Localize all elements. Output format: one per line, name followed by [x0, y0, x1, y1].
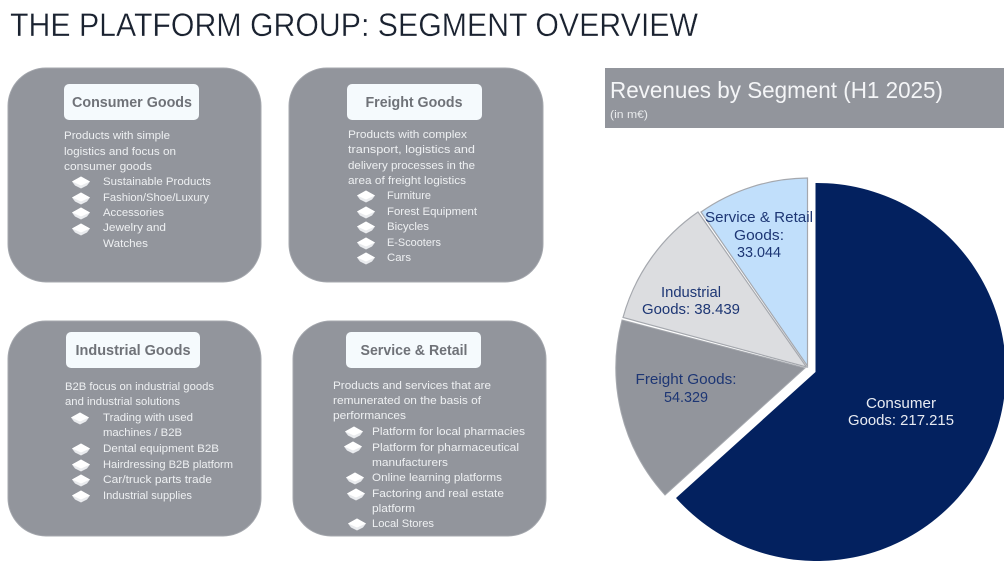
list: Freight Goods items: Forest Equipment	[387, 206, 478, 218]
label: Industrial: Goods: 38.439	[642, 302, 740, 318]
list: Service & Retail items: Local Stores	[372, 518, 434, 530]
panel: Consumer Goods	[8, 68, 261, 282]
text: Industrial Goods description: B2B focus on industrial goods	[65, 381, 214, 393]
text: Service & Retail description: performances	[333, 410, 406, 422]
list: Consumer Goods items: Sustainable Products	[103, 176, 211, 188]
label: Service & Retail: 33.044	[737, 245, 781, 261]
heading: Industrial Goods: Industrial Goods	[76, 343, 190, 359]
list: Consumer Goods items: Jewelry and	[103, 222, 166, 234]
list: Service & Retail items: manufacturers	[372, 457, 448, 469]
heading: Consumer Goods	[64, 84, 199, 120]
pie chart	[616, 178, 1004, 561]
list: Industrial Goods items	[71, 412, 233, 502]
text: Freight Goods description: Products with complex	[348, 129, 467, 141]
heading: Freight Goods	[347, 84, 482, 120]
list: Industrial Goods items: Hairdressing B2B platform	[103, 459, 233, 471]
text: Service & Retail description: remunerated on the basis of	[333, 395, 482, 407]
heading: Industrial Goods	[66, 332, 200, 368]
label: Freight Goods: 54.329	[664, 390, 708, 406]
label: Industrial: Industrial	[661, 285, 721, 301]
label: Service & Retail: Service & Retail	[705, 210, 813, 226]
slice: Industrial Goods	[623, 212, 806, 367]
text: Freight Goods description: area of freight logistics	[348, 175, 466, 187]
list: Consumer Goods items: Accessories	[103, 207, 164, 219]
list: Service & Retail items: Platform for pharmaceutical	[372, 442, 519, 454]
label: Freight Goods: Freight Goods:	[636, 372, 736, 388]
label: Consumer Goods: Goods: 217.215	[848, 413, 954, 429]
slice: Service & Retail	[701, 178, 808, 366]
text: Consumer Goods description: consumer goods	[64, 161, 152, 173]
list: Service & Retail items	[344, 426, 525, 530]
panel: revenues header	[605, 68, 1004, 128]
list: Consumer Goods items: Fashion/Shoe/Luxury	[103, 192, 209, 204]
text: Freight Goods description: delivery processes in the	[348, 160, 475, 172]
text: Consumer Goods description: Products with simple	[64, 130, 170, 142]
list: Freight Goods items: Furniture	[387, 190, 431, 202]
list: Service & Retail items: Factoring and real estate	[372, 488, 504, 500]
slice: Consumer Goods	[676, 183, 1004, 561]
heading: Service & Retail: Service & Retail	[360, 343, 468, 359]
list: Freight Goods items	[357, 190, 478, 264]
list: Industrial Goods items: Industrial supplies	[103, 490, 192, 502]
heading: Service & Retail	[346, 332, 481, 368]
list: Industrial Goods items: Dental equipment B2B	[103, 443, 219, 455]
heading: Revenues by Segment: Revenues by Segment (H1 2025)	[610, 77, 943, 103]
text: unit note: (in m€)	[610, 109, 648, 121]
list: Service & Retail items: Online learning platforms	[372, 472, 502, 484]
label: Service & Retail: Goods:	[734, 228, 784, 244]
list: Service & Retail items: Platform for local pharmacies	[372, 426, 525, 438]
list: Industrial Goods items: Trading with used	[103, 412, 193, 424]
text: Freight Goods description: transport, logistics and	[348, 144, 475, 156]
heading: Freight Goods: Freight Goods	[366, 95, 462, 111]
list: Freight Goods items: E-Scooters	[387, 237, 441, 249]
slice: Freight Goods	[616, 320, 805, 495]
list: Service & Retail items: platform	[372, 503, 415, 515]
list: Industrial Goods items: Car/truck parts trade	[103, 474, 212, 486]
title: THE PLATFORM GROUP: SEGMENT OVERVIEW	[10, 7, 699, 43]
panel: Freight Goods	[289, 68, 543, 282]
label: Consumer Goods: Consumer	[866, 396, 936, 412]
list: Freight Goods items: Bicycles	[387, 221, 429, 233]
panel: Industrial Goods	[8, 321, 261, 536]
list: Freight Goods items: Cars	[387, 252, 411, 264]
text: Industrial Goods description: and industrial solutions	[65, 396, 180, 408]
heading: Consumer Goods: Consumer Goods	[72, 95, 192, 111]
text: Consumer Goods description: logistics and focus on	[64, 146, 176, 158]
panel: Service & Retail	[293, 321, 546, 536]
text: Service & Retail description: Products and services that are	[333, 380, 491, 392]
list: Consumer Goods items: Watches	[103, 238, 148, 250]
list: Consumer Goods items	[72, 176, 211, 250]
list: Industrial Goods items: machines / B2B	[103, 427, 182, 439]
